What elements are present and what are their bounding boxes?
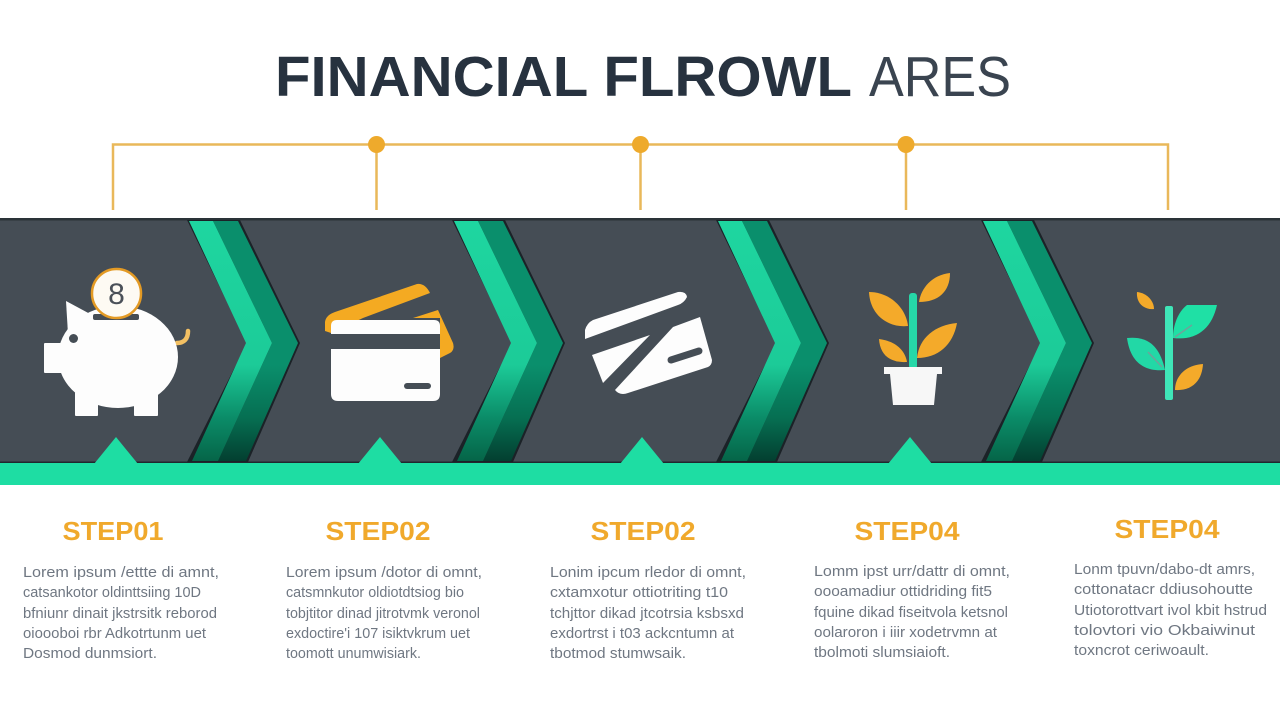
step 5 text: Lonm tpuvn/dabo-dt amrs, bbox=[1074, 561, 1255, 578]
step 1 text: catsankotor oldinttsiing 10D bbox=[23, 584, 201, 601]
chevron arrow 4 bbox=[981, 220, 1094, 462]
step 5 text bbox=[1074, 514, 1267, 659]
step 1 text: STEP01 bbox=[62, 516, 164, 546]
step 1 text: Dosmod dunmsiort. bbox=[23, 645, 157, 662]
teal base strip with pointers bbox=[0, 437, 1280, 485]
icon: piggy bank bbox=[44, 269, 188, 416]
step 5 text: Utiotorottvart ivol kbit hstrud bbox=[1074, 602, 1267, 619]
title: ARES bbox=[869, 45, 1011, 109]
step 4 text bbox=[814, 516, 1010, 661]
step 3 text: exdortrst i t03 ackcntumn at bbox=[550, 625, 735, 642]
icon: credit cards bbox=[325, 284, 454, 401]
step 2 text bbox=[286, 516, 482, 662]
chevron arrow 2 bbox=[452, 220, 565, 462]
step 2 text: Lorem ipsum /dotor di omnt, bbox=[286, 564, 482, 581]
step 3 text: tchjttor dikad jtcotrsia ksbsxd bbox=[550, 605, 744, 622]
step 2 text: tobjtitor dinad jitrotvmk veronol bbox=[286, 605, 480, 622]
dark process band bbox=[0, 218, 1280, 464]
icon: potted plant bbox=[869, 273, 957, 405]
chevron arrow 1 bbox=[187, 220, 300, 462]
step 4 text: tbolmoti slumsiaioft. bbox=[814, 644, 950, 661]
icon: slashed credit card bbox=[585, 292, 712, 394]
step 1 text: oioooboi rbr Adkotrtunm uet bbox=[23, 625, 207, 642]
step 1 text: bfniunr dinait jkstrsitk reborod bbox=[23, 605, 217, 622]
step 2 text: toomott unumwisiark. bbox=[286, 645, 421, 662]
chevron arrow 3 bbox=[716, 220, 829, 462]
step 5 text: cottonatacr ddiusohoutte bbox=[1074, 581, 1253, 598]
step 4 text: oooamadiur ottidriding fit5 bbox=[814, 583, 992, 600]
step 2 text: STEP02 bbox=[326, 516, 430, 546]
step 3 text: Lonim ipcum rledor di omnt, bbox=[550, 564, 746, 581]
step 3 text bbox=[550, 516, 746, 662]
step 2 text: catsmnkutor oldiotdtsiog bio bbox=[286, 584, 464, 601]
title: FINANCIAL FLROWL bbox=[275, 45, 852, 109]
step 4 text: fquine dikad fiseitvola ketsnol bbox=[814, 604, 1008, 621]
step 1 text: Lorem ipsum /ettte di amnt, bbox=[23, 564, 219, 581]
step 3 text: cxtamxotur ottiotriting t10 bbox=[550, 584, 728, 601]
icon: sprout bbox=[1127, 292, 1217, 400]
timeline connector bbox=[113, 136, 1168, 210]
step 2 text: exdoctire'i 107 isiktvkrum uet bbox=[286, 625, 471, 642]
step 5 text: toxncrot ceriwoault. bbox=[1074, 642, 1209, 659]
step 5 text: STEP04 bbox=[1114, 514, 1220, 544]
step 4 text: Lomm ipst urr/dattr di omnt, bbox=[814, 563, 1010, 580]
step 3 text: STEP02 bbox=[590, 516, 696, 546]
step 4 text: STEP04 bbox=[854, 516, 960, 546]
step 3 text: tbotmod stumwsaik. bbox=[550, 645, 686, 662]
step 1 text bbox=[23, 516, 219, 662]
step 5 text: tolovtori vio Okbaiwinut bbox=[1074, 622, 1256, 639]
step 4 text: oolaroron i iiir xodetrvmn at bbox=[814, 624, 998, 641]
icon: piggy bank: 8 bbox=[108, 278, 125, 311]
